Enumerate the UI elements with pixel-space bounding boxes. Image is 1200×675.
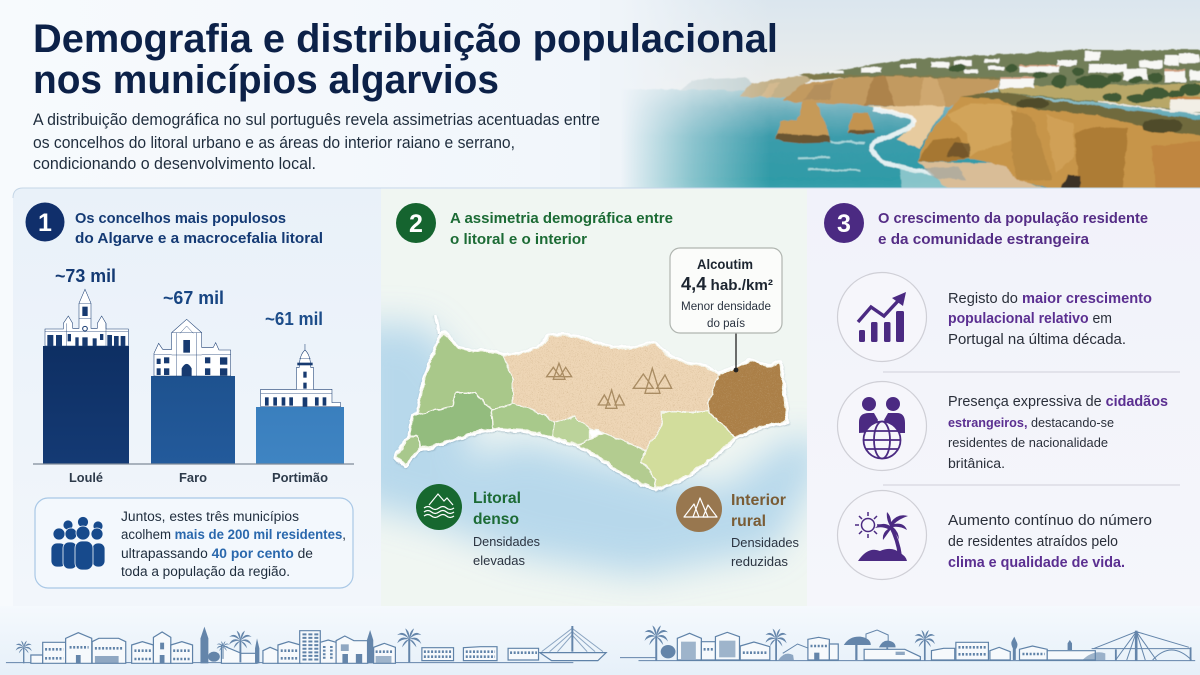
bar: Loulé: ~73 mil (55, 266, 116, 286)
item: foreign citizens: Presença expressiva de cidadãos (948, 394, 1168, 410)
panel 2: coast and interior asymmetry (381, 189, 807, 606)
callout: combined population (35, 498, 353, 588)
intro text (33, 111, 600, 173)
region: Portimão (492, 403, 555, 437)
item: growth (838, 272, 1152, 362)
heading panel 2: o litoral e o interior (450, 231, 587, 248)
region: Lagos (410, 393, 493, 447)
heading panel 2 (450, 210, 673, 248)
region: southwest tip (397, 437, 420, 465)
bar chart (33, 266, 354, 485)
bar: Faro: Faro (179, 470, 207, 485)
callout text: toda a população da região. (121, 564, 290, 579)
bar: Portimão (256, 309, 344, 485)
legend: rural interior (676, 486, 799, 569)
bar: Portimão: ~61 mil (265, 309, 323, 329)
legend: rural interior: Interior (731, 492, 786, 509)
callout text: ultrapassando 40 por cento de (121, 546, 313, 561)
sea (626, 88, 1200, 188)
title: Demografia e distribuição populacional (33, 17, 778, 61)
bar: Faro (151, 288, 235, 485)
map of Algarve (397, 315, 788, 488)
axis (33, 463, 354, 465)
sea watercolor wash (350, 325, 830, 575)
item: foreign citizens (838, 382, 1168, 471)
legend: rural interior: rural (731, 513, 766, 530)
hero fade (600, 0, 770, 188)
icon: waves and mountains (424, 494, 454, 518)
callout: Alcoutim density: 4,4 hab./km² (681, 274, 773, 294)
icon: people and globe (859, 397, 905, 458)
item: climate and quality of life: de residentes atraídos pelo (948, 534, 1118, 550)
icon: growth chart (858, 292, 906, 342)
bar: Faro: ~67 mil (163, 288, 224, 308)
number badge 1 (26, 202, 64, 242)
heading panel 3: O crescimento da população residente (878, 210, 1148, 227)
callout: Alcoutim density: do país (707, 318, 745, 330)
region: Alcoutim (708, 361, 787, 437)
icon: people group (51, 516, 105, 570)
panel 3: growth of resident population (807, 189, 1200, 606)
ridge and village (814, 50, 1200, 117)
callout: Alcoutim density: Alcoutim (697, 257, 753, 272)
callout text: acolhem mais de 200 mil residentes, (121, 527, 346, 542)
heading panel 3 (878, 210, 1148, 248)
bar: Loulé (43, 266, 129, 485)
intro text: condicionando o desenvolvimento local. (33, 155, 316, 173)
legend: rural interior: Densidades (731, 536, 799, 550)
item: climate and quality of life (838, 490, 1152, 580)
skyline right (620, 625, 1195, 661)
heading panel 1: do Algarve e a macrocefalia litoral (75, 230, 323, 247)
callout text: Juntos, estes três municípios (121, 509, 299, 524)
item: foreign citizens: britânica. (948, 456, 1005, 471)
legend: dense coast: Litoral (473, 490, 521, 507)
legend: dense coast: elevadas (473, 554, 525, 568)
bar: Loulé: Loulé (69, 470, 103, 485)
panel 1: most populous municipalities (13, 188, 1200, 606)
footer band (0, 606, 1200, 675)
number badge 1: 1 (38, 209, 52, 237)
number badge 2 (396, 203, 436, 243)
legend: rural interior: reduzidas (731, 555, 788, 569)
heading panel 2: A assimetria demográfica entre (450, 210, 673, 227)
item: climate and quality of life: clima e qualidade de vida. (948, 555, 1125, 571)
heading panel 1 (75, 210, 323, 247)
item: climate and quality of life: Aumento contínuo do número (948, 513, 1152, 529)
heading panel 1: Os concelhos mais populosos (75, 210, 286, 227)
item: growth: Portugal na última década. (948, 332, 1126, 348)
item: foreign citizens: residentes de nacionalidade (948, 435, 1108, 450)
title: nos municípios algarvios (33, 58, 499, 102)
skyline left (6, 626, 606, 663)
icon: sun and palm island (855, 512, 908, 561)
item: growth: populacional relativo em (948, 311, 1112, 327)
region: Tavira (642, 412, 735, 488)
region: Loulé and Faro coast (578, 433, 657, 488)
region: northwest coast (418, 333, 513, 414)
legend: dense coast (416, 484, 540, 568)
number badge 3: 3 (837, 210, 851, 238)
region: Albufeira (553, 417, 590, 445)
hero photo: Algarve coast (625, 0, 1200, 188)
foreground cliff (918, 92, 1200, 188)
legend: dense coast: denso (473, 511, 519, 528)
rock stacks (776, 102, 830, 143)
item: growth: Registo do maior crescimento (948, 291, 1152, 307)
callout text (121, 509, 346, 579)
legend: dense coast: Densidades (473, 535, 540, 549)
item: foreign citizens: estrangeiros, destacando-se (948, 415, 1114, 430)
bar: Portimão: Portimão (272, 470, 328, 485)
callout: Alcoutim density (670, 248, 782, 372)
intro text: os concelhos do litoral urbano e as áreas do interior raiano e serrano, (33, 134, 515, 152)
title (33, 17, 778, 102)
number badge 3 (824, 203, 864, 243)
icon: mountains (684, 498, 717, 517)
region: central interior (503, 335, 718, 450)
intro text: A distribuição demográfica no sul português revela assimetrias acentuadas entre (33, 111, 600, 129)
icon: mountains on map (547, 363, 672, 408)
number badge 2: 2 (409, 210, 423, 238)
foreground beach (917, 160, 1045, 188)
heading panel 3: e da comunidade estrangeira (878, 231, 1090, 248)
callout: Alcoutim density: Menor densidade (681, 301, 771, 313)
